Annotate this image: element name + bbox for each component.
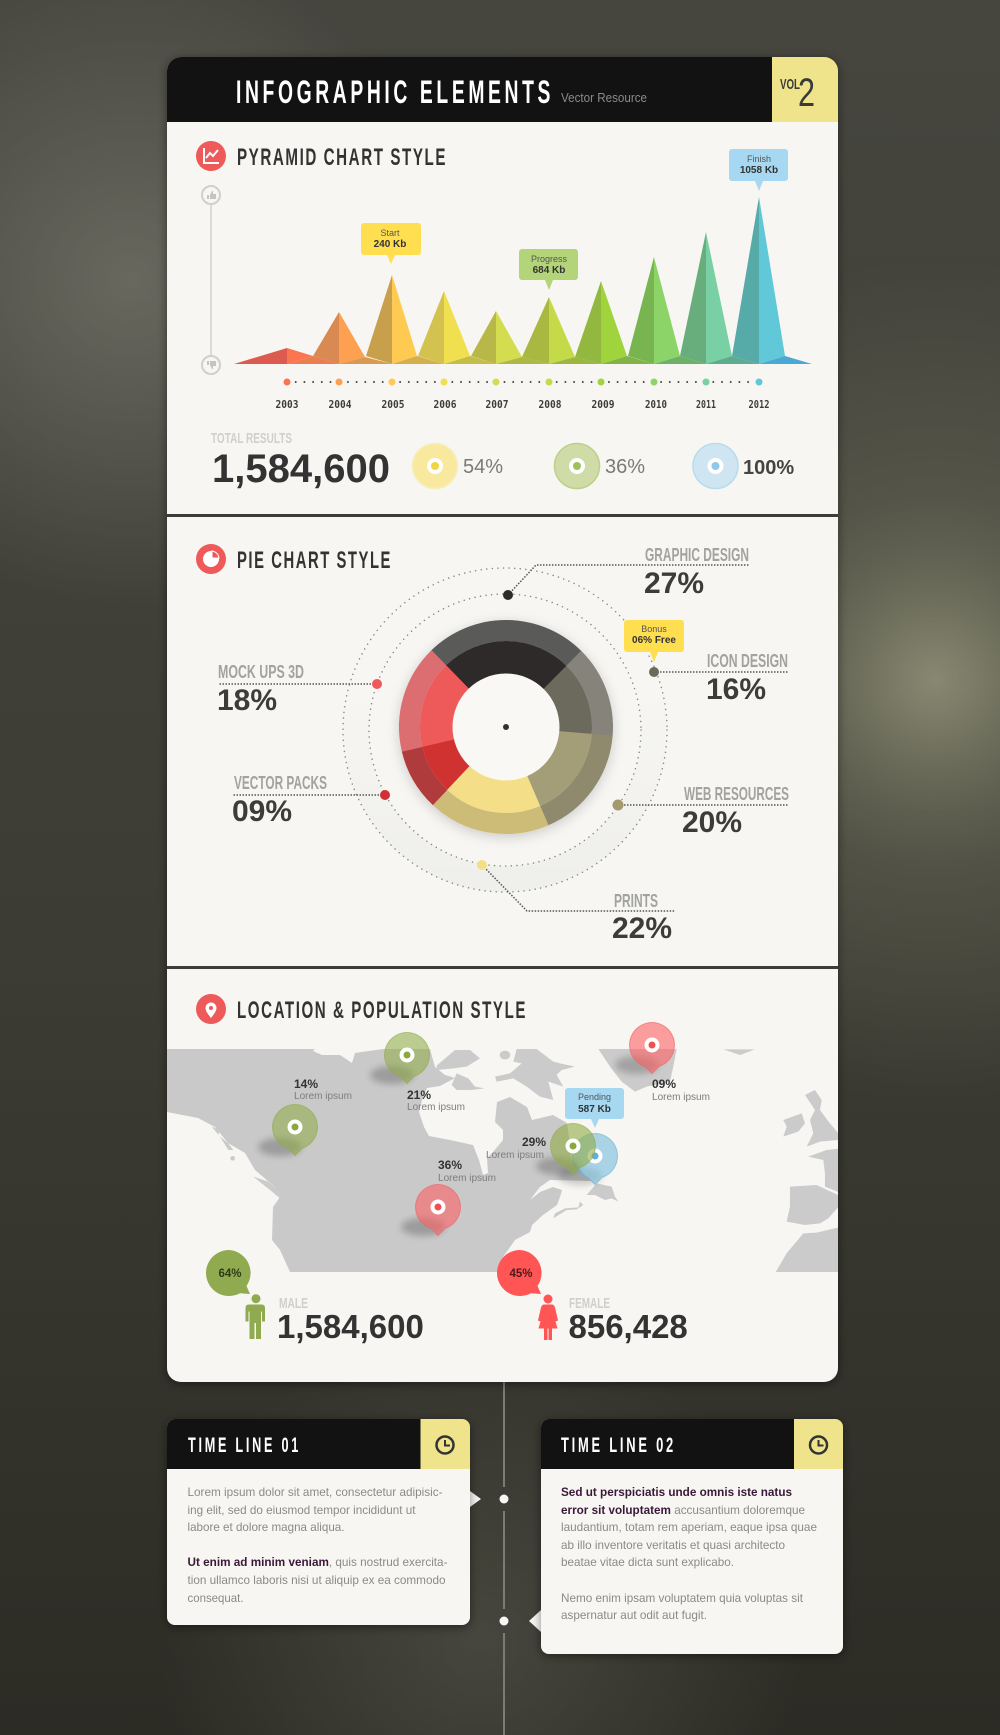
card 01 text: Ut enim ad minim veniam, quis nostrud exercita- — [188, 1555, 448, 1569]
callout: pending: 587 Kb — [578, 1104, 611, 1115]
map label 29%: 29% — [522, 1135, 546, 1149]
timeline card 02 — [529, 1419, 843, 1654]
panel: pie chart — [196, 544, 789, 945]
bubble: 45%: 45% — [509, 1268, 533, 1280]
stat 36% — [554, 444, 645, 488]
card 01 text: consequat. — [188, 1591, 244, 1605]
pin: blue pending — [558, 1134, 618, 1185]
pyramids — [234, 197, 812, 364]
label: graphic design: GRAPHIC DESIGN — [645, 545, 749, 565]
map label 14%: 14% — [294, 1077, 318, 1091]
year dots — [284, 378, 762, 386]
year labels: 2012 — [748, 398, 770, 411]
map label 29%: Lorem ipsum — [486, 1149, 544, 1161]
stat 54% — [412, 444, 503, 488]
label: vector packs: VECTOR PACKS — [234, 773, 327, 793]
heading: location and population style — [196, 994, 527, 1024]
label: vector packs — [232, 773, 327, 828]
year labels: 2011 — [696, 398, 716, 411]
label: icon design — [706, 651, 788, 706]
label: graphic design — [644, 545, 749, 600]
panel: pyramid chart — [196, 141, 812, 491]
map label 36% — [438, 1158, 496, 1184]
year labels: 2009 — [592, 398, 614, 411]
scale with thumbs icons — [202, 186, 220, 374]
label: web resources — [682, 784, 789, 839]
callout: start: Start — [380, 228, 400, 238]
volume badge: 2 — [798, 71, 815, 115]
total results: TOTAL RESULTS — [211, 430, 292, 447]
card 02 text: Nemo enim ipsam voluptatem quia voluptas sit — [561, 1591, 804, 1605]
heading: pyramid chart style: PYRAMID CHART STYLE — [237, 144, 447, 171]
donut chart — [370, 591, 642, 863]
icon: male figure — [246, 1294, 265, 1339]
card 01 text: Lorem ipsum dolor sit amet, consectetur adipisic- — [188, 1485, 442, 1499]
world map — [167, 1049, 842, 1273]
subtitle: Vector Resource — [561, 91, 647, 105]
heading: pie chart style — [196, 544, 392, 574]
callout: progress: 684 Kb — [533, 265, 565, 276]
stat 54%: 54% — [463, 456, 503, 478]
callout: start: 240 Kb — [374, 239, 406, 250]
year labels: 2007 — [486, 398, 508, 411]
stat 100%: 100% — [743, 457, 794, 479]
year labels: 2010 — [645, 398, 667, 411]
bubble: 64% — [206, 1250, 251, 1296]
map label 36%: Lorem ipsum — [438, 1172, 496, 1184]
text: male value: MALE — [279, 1295, 308, 1312]
card 02 text: beatae vitae dicta sunt explicabo. — [561, 1555, 734, 1569]
total results: 1,584,600 — [212, 447, 390, 491]
year labels — [276, 398, 770, 411]
dotted rings — [343, 568, 667, 892]
text: female value: FEMALE — [569, 1295, 610, 1312]
volume badge: VOL — [780, 76, 800, 93]
map label 09%: Lorem ipsum — [652, 1091, 710, 1103]
label: mock ups 3d: MOCK UPS 3D — [218, 662, 304, 682]
map label 09% — [652, 1077, 710, 1103]
card 02 header — [541, 1419, 843, 1469]
map label 14%: Lorem ipsum — [294, 1090, 352, 1102]
year labels: 2005 — [382, 398, 404, 411]
heading: location and population style: LOCATION & POPULATION STYLE — [237, 997, 527, 1024]
year labels: 2006 — [434, 398, 457, 411]
leader lines — [218, 565, 788, 911]
label: icon design: 16% — [706, 673, 766, 706]
callout: bonus — [624, 620, 684, 662]
timeline card 01 — [167, 1419, 481, 1625]
label: mock ups 3d: 18% — [217, 684, 277, 717]
text: female value: 856,428 — [568, 1308, 688, 1345]
label: graphic design: 27% — [644, 567, 704, 600]
label: mock ups 3d — [217, 662, 304, 717]
pin: red 36% — [401, 1185, 460, 1236]
year labels: 2003 — [276, 398, 298, 411]
label: web resources: WEB RESOURCES — [684, 784, 789, 804]
pin: red 09% — [615, 1023, 674, 1074]
card 01 text — [188, 1485, 448, 1605]
card 01 header: TIME LINE 01 — [188, 1434, 301, 1457]
callout: start — [361, 223, 421, 264]
callout: finish: 1058 Kb — [740, 165, 778, 176]
map label 21%: Lorem ipsum — [407, 1101, 465, 1113]
card 01 header — [167, 1419, 470, 1469]
pin: green 29% — [536, 1124, 596, 1175]
card 01 text: tion ullamco laboris nisi ut aliquip ex ea commodo — [188, 1573, 446, 1587]
title: INFOGRAPHIC ELEMENTS — [236, 74, 554, 110]
card 02 text: aspernatur aut odit aut fugit. — [561, 1608, 707, 1622]
callout: pending — [565, 1088, 624, 1128]
marker dots — [372, 590, 659, 870]
callout: finish: Finish — [747, 154, 771, 164]
map label 36%: 36% — [438, 1158, 462, 1172]
stat 100% — [693, 444, 794, 488]
label: web resources: 20% — [682, 806, 742, 839]
callout: bonus: 06% Free — [632, 635, 676, 646]
card 02 header: TIME LINE 02 — [561, 1434, 676, 1457]
label: icon design: ICON DESIGN — [707, 651, 788, 671]
pin: green 14% — [258, 1105, 318, 1156]
card 02 text: error sit voluptatem accusantium doloremque — [561, 1503, 805, 1517]
pin: green 21% — [370, 1033, 430, 1084]
panel: location and population — [167, 994, 842, 1345]
text: male value: 1,584,600 — [277, 1308, 424, 1345]
heading: pyramid chart style — [196, 141, 447, 171]
stat 36%: 36% — [605, 456, 645, 478]
map label 14% — [294, 1077, 352, 1102]
card 02 text — [561, 1485, 817, 1622]
label: prints: 22% — [612, 912, 672, 945]
callout: bonus: Bonus — [641, 624, 667, 634]
card 02 text: Sed ut perspiciatis unde omnis iste natus — [561, 1485, 792, 1499]
label: prints: PRINTS — [614, 891, 658, 911]
callout: progress — [519, 249, 578, 290]
card 02 text: laudantium, totam rem aperiam, eaque ipsa quae — [561, 1520, 817, 1534]
map label 09%: 09% — [652, 1077, 676, 1091]
card 01 text: labore et dolore magna aliqua. — [188, 1520, 344, 1534]
timeline axis — [500, 1382, 508, 1735]
year labels: 2004 — [328, 398, 352, 411]
map label 29% — [486, 1135, 546, 1161]
label: vector packs: 09% — [232, 795, 292, 828]
card 02 text: ab illo inventore veritatis et quasi architecto — [561, 1538, 785, 1552]
callout: progress: Progress — [531, 254, 568, 264]
callout: pending: Pending — [578, 1092, 611, 1102]
card 01 text: ing elit, sed do eiusmod tempor incididunt ut — [188, 1503, 416, 1517]
male statistic — [206, 1250, 424, 1345]
label: prints — [612, 891, 672, 945]
map label 21% — [407, 1088, 465, 1113]
map label 21%: 21% — [407, 1088, 431, 1102]
callout: finish — [729, 149, 788, 191]
icon: female figure — [538, 1294, 558, 1340]
heading: pie chart style: PIE CHART STYLE — [237, 547, 392, 574]
bubble: 64%: 64% — [218, 1268, 242, 1280]
year labels: 2008 — [538, 398, 562, 411]
header bar — [167, 57, 838, 122]
volume badge — [780, 78, 814, 106]
female statistic — [497, 1250, 688, 1345]
bubble: 45% — [497, 1250, 542, 1296]
main card — [167, 57, 842, 1382]
